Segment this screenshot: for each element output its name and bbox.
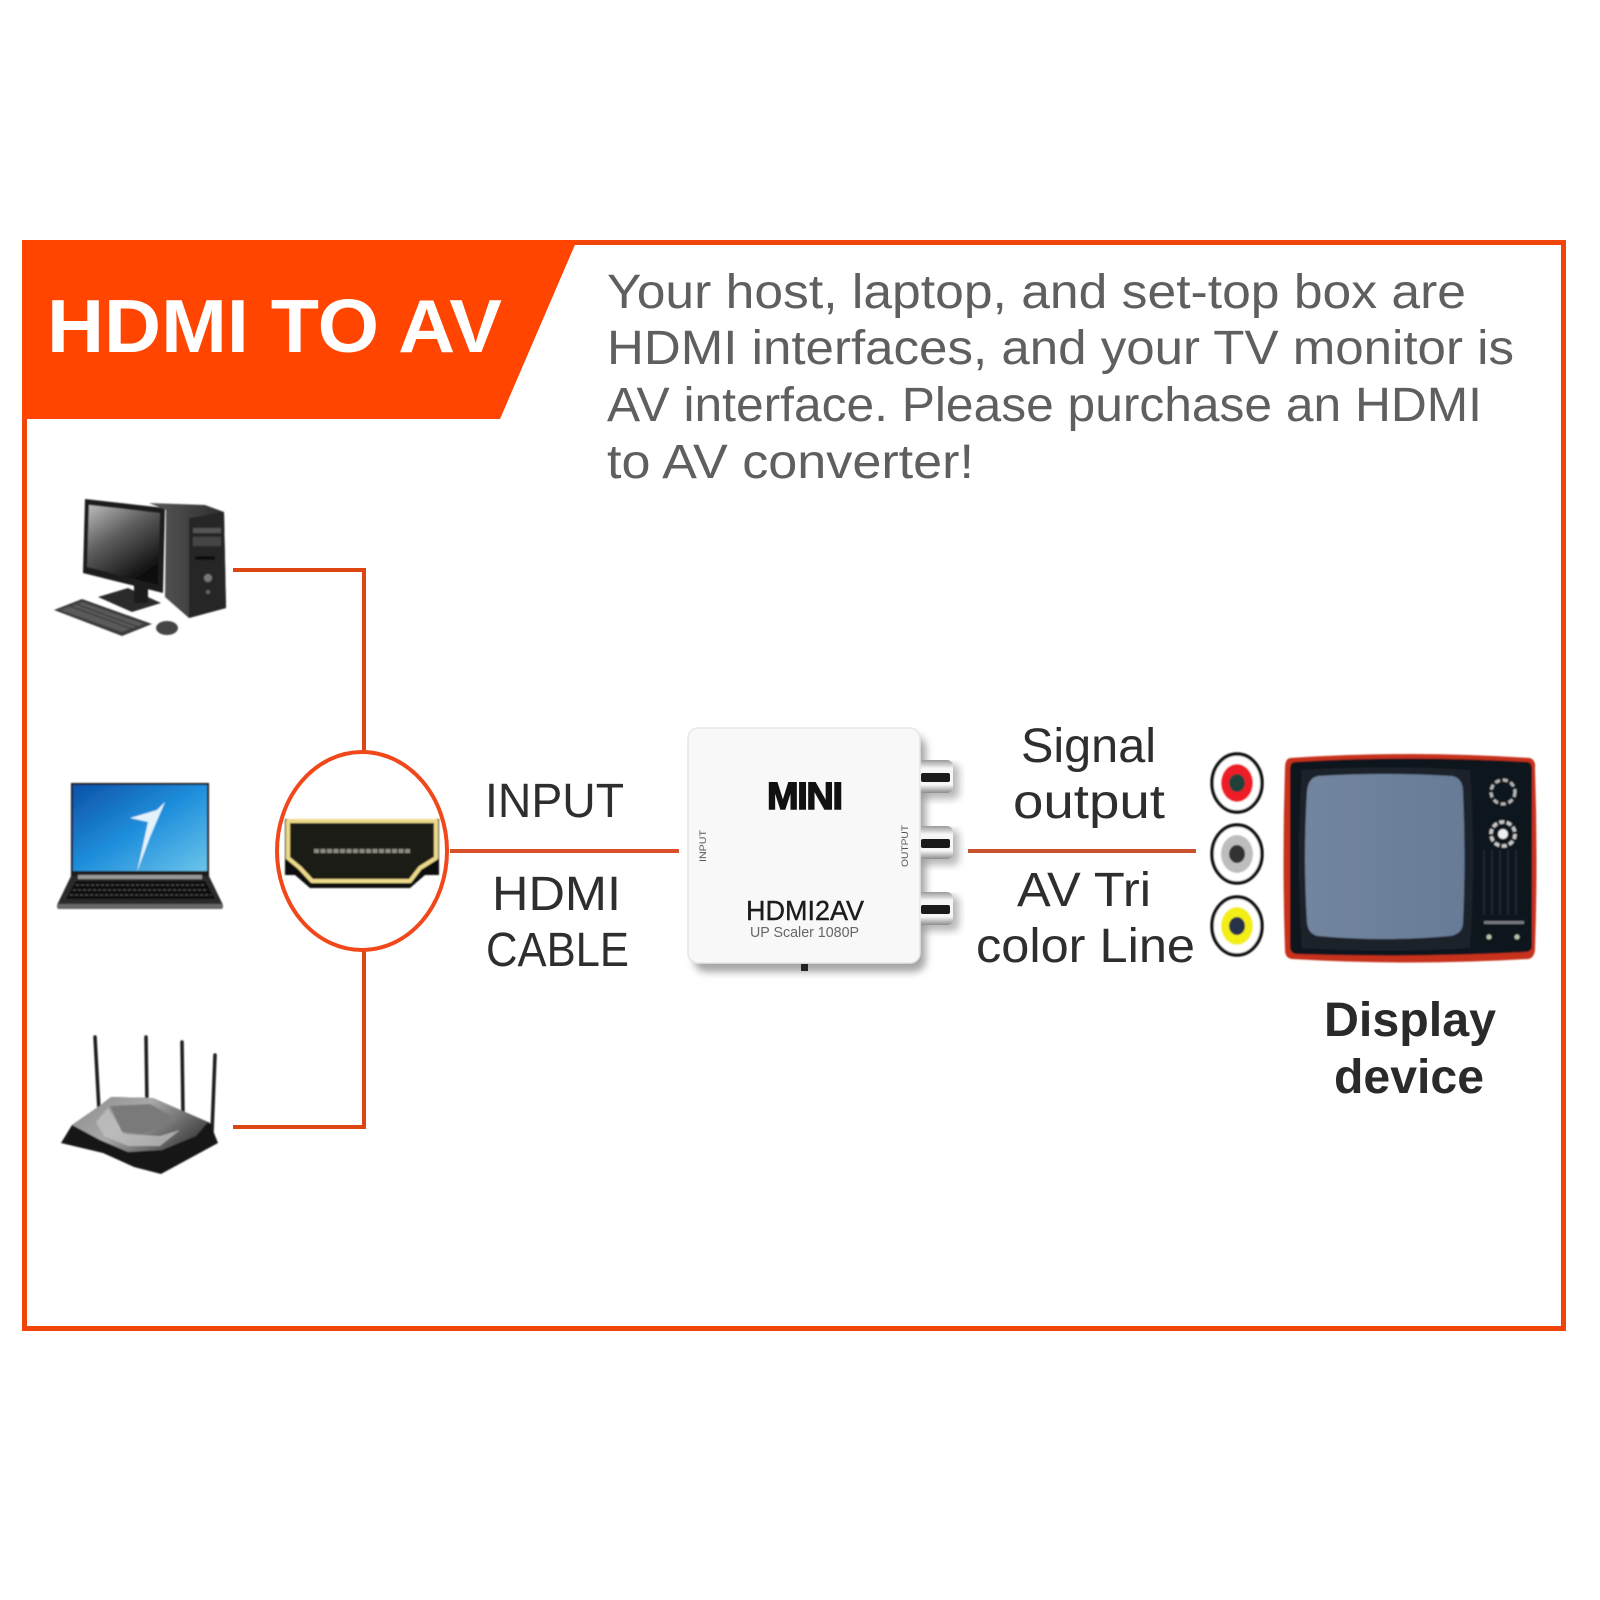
description text: to AV converter! xyxy=(607,436,974,489)
icon: white RCA socket xyxy=(1212,825,1262,883)
converter device: UP Scaler 1080P xyxy=(750,924,859,941)
label: HDMI CABLE: CABLE xyxy=(486,924,629,977)
label: INPUT: INPUT xyxy=(485,775,624,828)
line: input to converter xyxy=(450,849,679,853)
converter device xyxy=(688,728,959,972)
label: Signal output: Signal xyxy=(1021,720,1156,773)
label: Display device xyxy=(1324,994,1496,1104)
label: AV Tri color Line: AV Tri xyxy=(1017,864,1151,917)
label: AV Tri color Line xyxy=(976,864,1195,973)
icon: television xyxy=(1284,754,1536,962)
line: converter to AV xyxy=(968,849,1196,853)
converter device: INPUT xyxy=(698,829,708,862)
panel frame xyxy=(24,242,1564,1328)
icon: desktop computer xyxy=(54,499,226,636)
converter device: OUTPUT xyxy=(900,824,910,867)
label: HDMI CABLE xyxy=(486,868,629,977)
label: HDMI CABLE: HDMI xyxy=(492,868,621,921)
description text: Your host, laptop, and set-top box are xyxy=(607,266,1466,319)
label: Display device: device xyxy=(1334,1051,1484,1104)
icon: HDMI port xyxy=(285,819,439,888)
title banner: HDMI TO AV xyxy=(47,284,502,368)
icon: yellow RCA socket xyxy=(1212,897,1262,955)
description text: AV interface. Please purchase an HDMI xyxy=(607,379,1482,432)
icon: red RCA socket xyxy=(1212,754,1262,812)
icon: laptop xyxy=(57,783,223,909)
label: Display device: Display xyxy=(1324,994,1496,1047)
converter device: HDMI2AV xyxy=(746,895,864,926)
title banner xyxy=(22,240,577,419)
RCA jacks on converter xyxy=(918,760,959,931)
description text xyxy=(607,266,1514,489)
label: AV Tri color Line: color Line xyxy=(976,920,1195,973)
converter device: MINI xyxy=(767,776,843,818)
HDMI port callout xyxy=(277,752,447,950)
icon: router xyxy=(61,1037,218,1174)
label: Signal output xyxy=(1013,720,1165,829)
description text: HDMI interfaces, and your TV monitor is xyxy=(607,322,1514,375)
label: Signal output: output xyxy=(1013,776,1165,829)
connector lines: source devices to HDMI port xyxy=(233,570,364,1127)
